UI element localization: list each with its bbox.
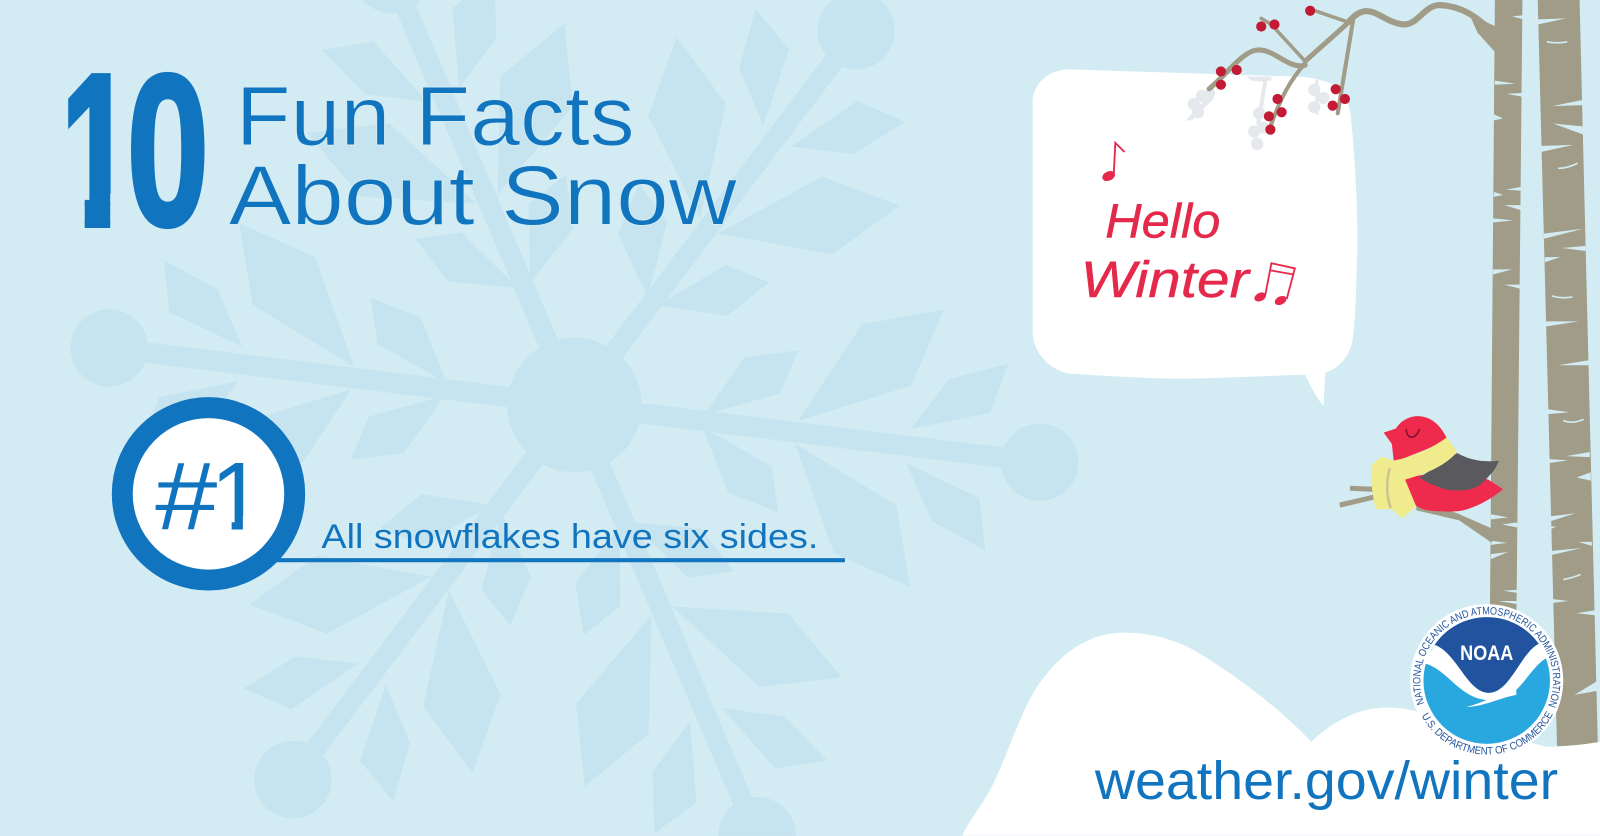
badge number: 1 [210, 442, 264, 551]
branch base [1469, 14, 1496, 53]
fact number 1 badge and rule [122, 408, 845, 580]
NOAA logo [1410, 604, 1564, 755]
badge number: # [155, 442, 217, 551]
badge ring [122, 408, 295, 580]
seal NOAA wordmark: NOAA [1460, 641, 1513, 665]
title number 10: 1 [61, 29, 133, 271]
seal gull [1424, 644, 1548, 707]
branch shadows on bubble [1186, 77, 1330, 150]
website url: weather.gov/winter [1094, 751, 1558, 811]
bird perch branch [1416, 500, 1492, 543]
bird eye [1406, 430, 1419, 437]
bird feet twigs [1340, 488, 1374, 505]
seal sky [1435, 617, 1539, 693]
bubble body and tail [1033, 69, 1357, 406]
berries [1216, 6, 1350, 135]
bird head [1384, 416, 1448, 462]
fact text: All snowflakes have six sides. [321, 518, 818, 556]
icon: beamed music notes [1253, 263, 1295, 307]
branches [1209, 5, 1495, 130]
title line 2: About Snow [229, 147, 738, 242]
greeting line 1: Hello [1105, 196, 1220, 249]
bird with scarf [1340, 416, 1503, 518]
seal top ring text: NATIONAL OCEANIC AND ATMOSPHERIC ADMINISTRATION [1412, 606, 1560, 708]
seal bottom ring text: U.S. DEPARTMENT OF COMMERCE [1422, 711, 1553, 755]
scarf [1371, 437, 1457, 518]
branch with berries [1209, 5, 1496, 135]
title number 10 [68, 72, 204, 230]
bird body [1405, 471, 1503, 512]
rule under fact [276, 558, 845, 562]
greeting line 2: Winter [1081, 251, 1251, 308]
icon: single music note [1101, 143, 1124, 183]
scarf fold [1387, 468, 1391, 508]
birch tree left [1490, 0, 1522, 633]
bark marks [1491, 15, 1598, 695]
snow hill [962, 633, 1600, 836]
seal ocean [1423, 617, 1550, 744]
title number 10: 0 [127, 29, 209, 271]
title [68, 72, 738, 230]
birch tree right [1538, 0, 1598, 750]
badge number [156, 463, 244, 530]
bird wing [1419, 453, 1499, 490]
speech bubble [1033, 69, 1357, 406]
seal disc [1410, 604, 1563, 757]
background snowflake [70, 0, 1079, 836]
title line 1: Fun Facts [236, 68, 635, 163]
